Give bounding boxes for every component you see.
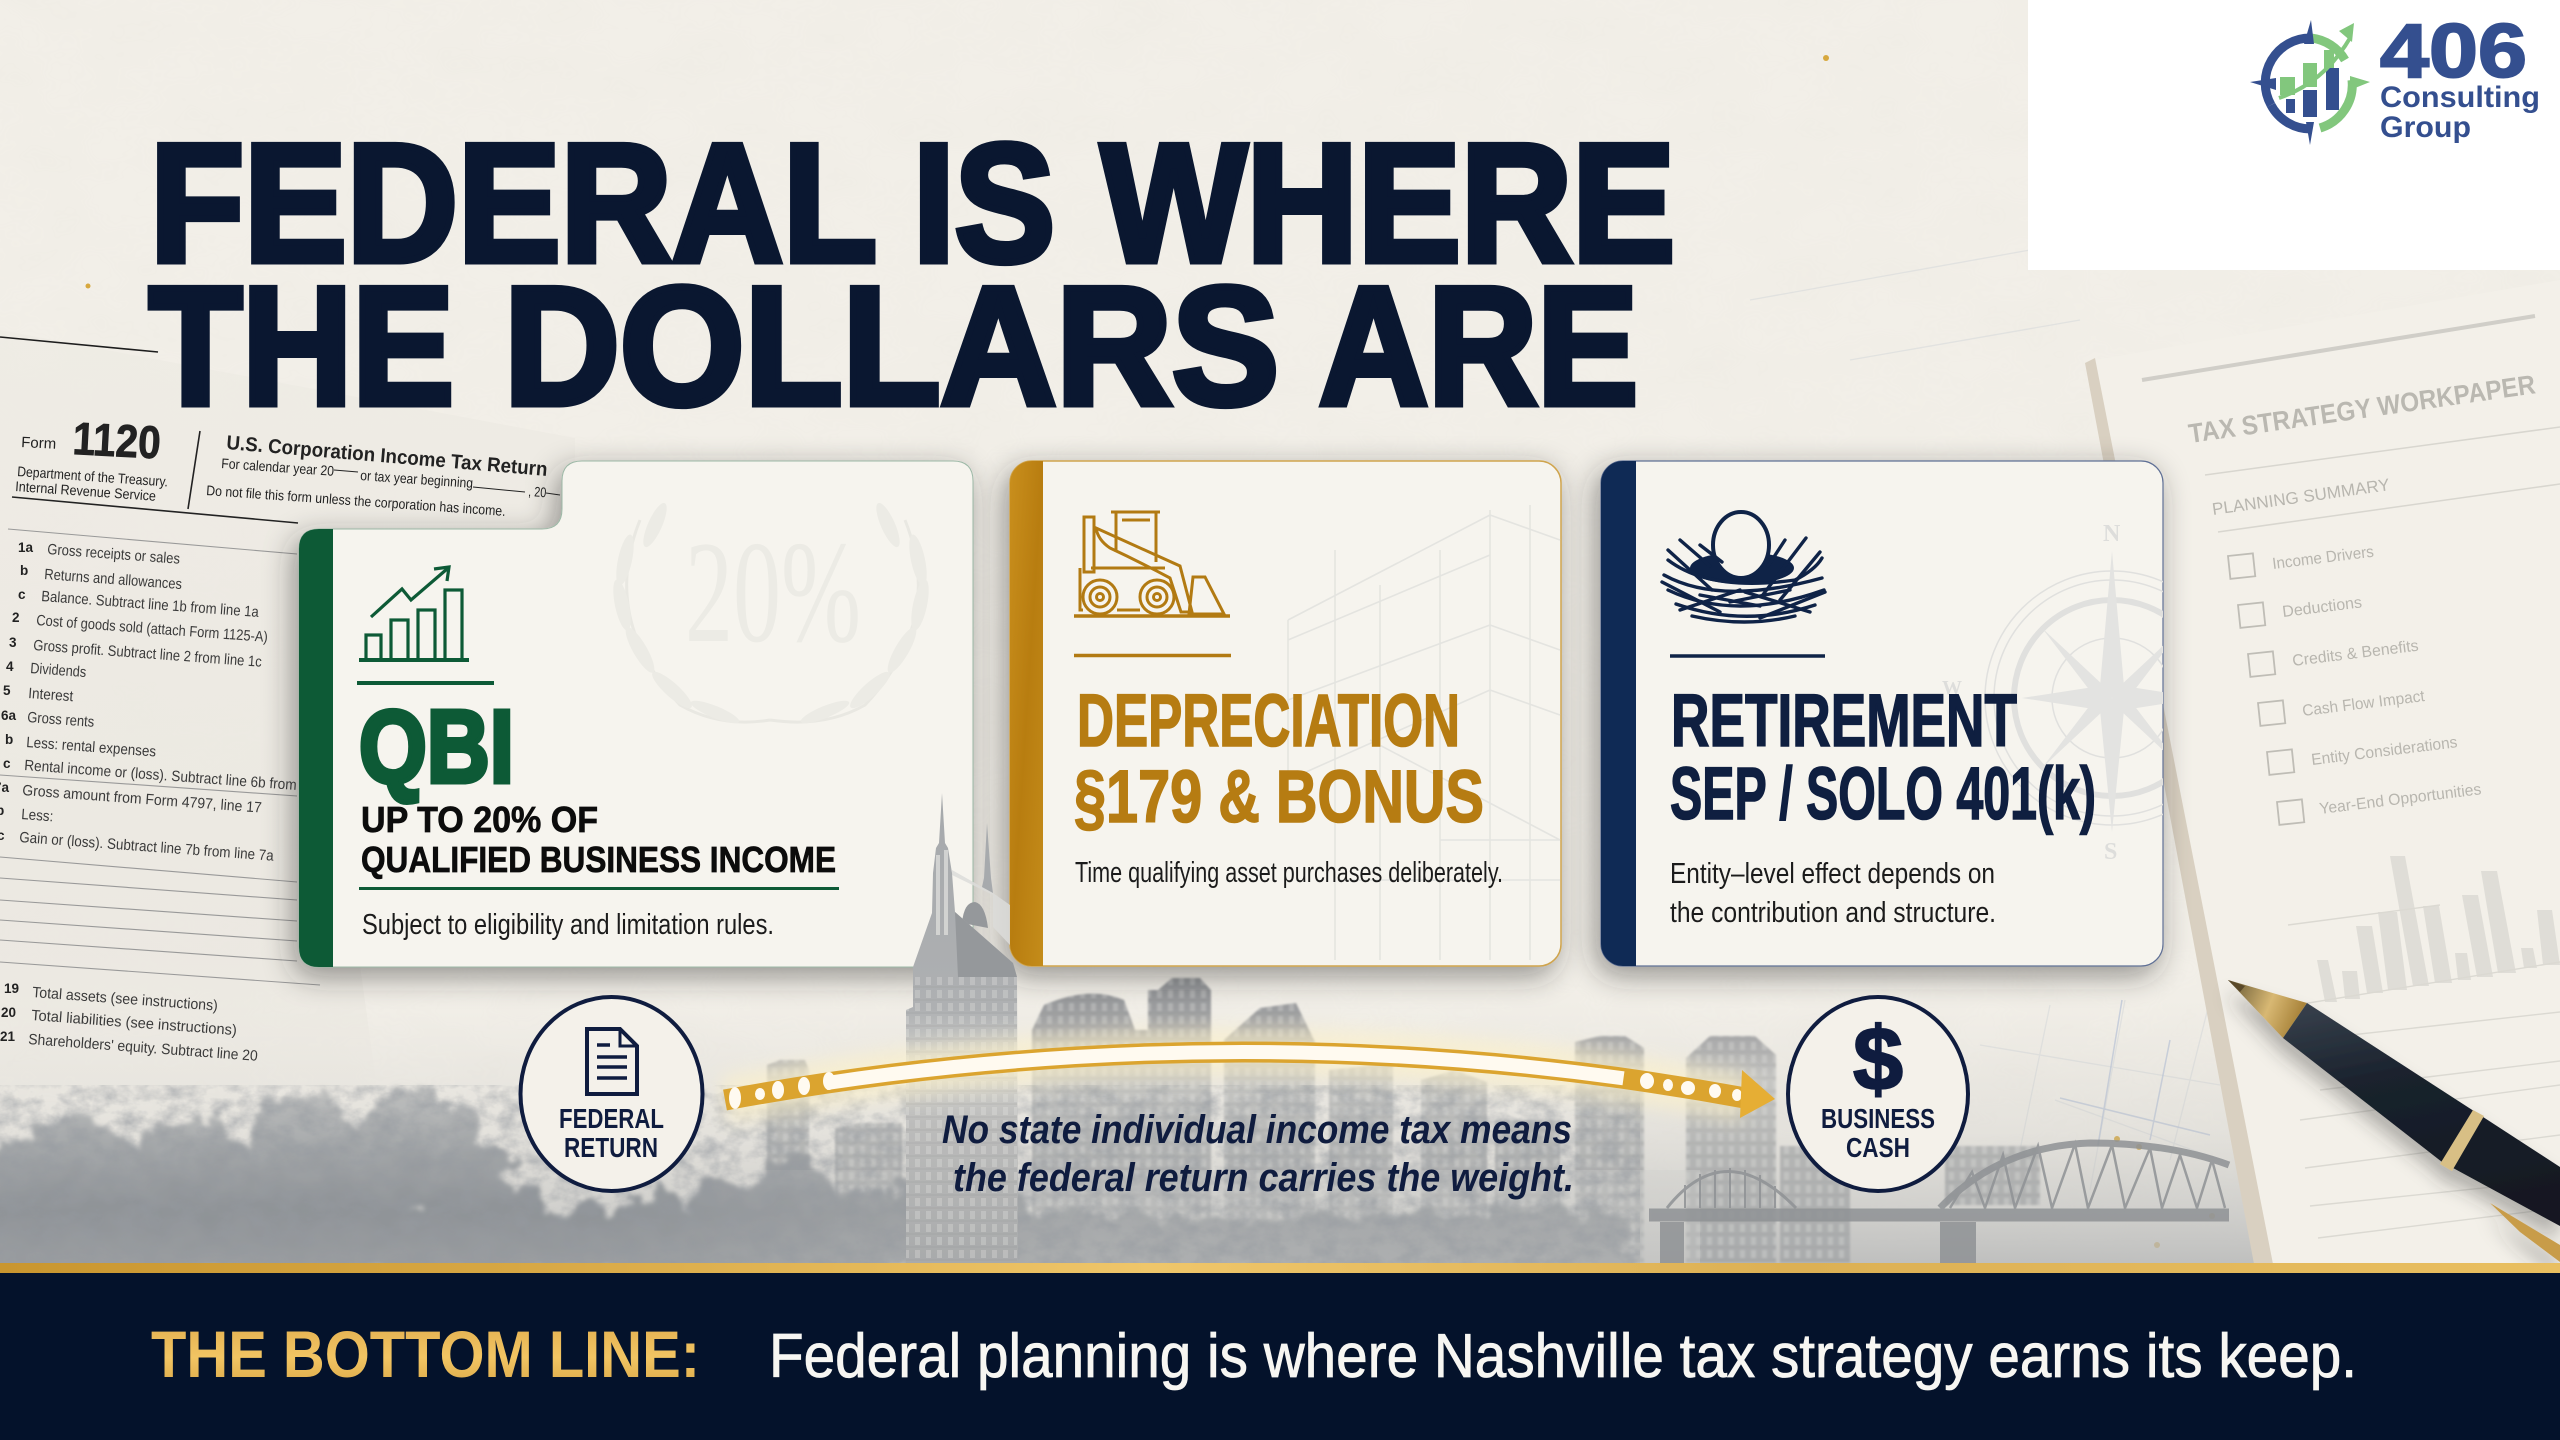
arrow caption	[942, 1108, 1574, 1200]
QBI subheading	[361, 799, 836, 880]
QBI subheading: QUALIFIED BUSINESS INCOME	[361, 839, 836, 880]
checklist: Credits & Benefits	[2291, 638, 2420, 670]
bottom line label: THE BOTTOM LINE:	[151, 1317, 700, 1391]
badge label: BUSINESS	[1821, 1103, 1935, 1134]
logo	[2028, 0, 2560, 270]
logo wordmark: 406	[2380, 9, 2527, 94]
form line numbers: b	[20, 563, 28, 578]
badge label	[1821, 1103, 1935, 1163]
form header: 1120	[71, 412, 162, 469]
badge label: FEDERAL	[559, 1103, 664, 1134]
form lines: Less: rental expenses	[26, 734, 157, 761]
form header: , 20	[528, 483, 547, 500]
form lines: Interest	[28, 685, 75, 705]
trees	[0, 1088, 1630, 1288]
icon: rising bar chart	[359, 567, 469, 660]
form lines	[19, 541, 297, 1065]
workpaper bar chart	[2317, 856, 2560, 1002]
form lines: Dividends	[30, 660, 87, 681]
form line numbers: b	[5, 732, 13, 747]
depreciation heading: DEPRECIATION	[1077, 679, 1460, 762]
icon: skid steer loader	[1074, 512, 1230, 616]
form lines: Gain or (loss). Subtract line 7b from line 7a	[19, 829, 275, 865]
form header: Form	[21, 434, 57, 453]
form header	[15, 412, 548, 519]
retirement note	[1670, 858, 1996, 929]
watermark: compass rose: S	[2104, 839, 2117, 865]
retirement heading	[1670, 679, 2096, 835]
icon: nest egg	[1662, 512, 1825, 622]
logo wordmark: Group	[2380, 111, 2471, 144]
watermark: 20% laurel	[610, 500, 932, 727]
form lines: Rental income or (loss). Subtract line 6b from	[24, 757, 297, 794]
form lines: Gross receipts or sales	[47, 541, 181, 568]
title: WHERE	[1101, 109, 1675, 297]
retirement heading: RETIREMENT	[1671, 679, 2017, 762]
arrow caption: No state individual income tax means	[942, 1108, 1572, 1152]
form line numbers: c	[18, 587, 26, 602]
watermark: compass rose: W	[1942, 677, 1962, 699]
watermark: 20% laurel: 20%	[685, 511, 861, 673]
form 1120 paper	[0, 330, 575, 1110]
arrow head	[1740, 1070, 1775, 1118]
title: FEDERAL	[150, 109, 877, 297]
watermark: building sketch	[1288, 505, 1560, 960]
checklist: Year-End Opportunities	[2318, 781, 2482, 818]
depreciation heading	[1074, 679, 1484, 838]
gold flow arrow	[725, 1052, 1775, 1118]
form line numbers: 20	[1, 1005, 16, 1020]
checklist: Cash Flow Impact	[2301, 688, 2426, 720]
watermark: compass rose	[1942, 525, 2163, 859]
form header: Do not file this form unless the corporation has income.	[206, 482, 506, 519]
form line numbers: 3	[9, 635, 17, 650]
form lines: Gross profit. Subtract line 2 from line 1c	[33, 637, 263, 671]
title: ARE	[1319, 252, 1638, 440]
title: IS	[913, 109, 1055, 297]
bridge	[1649, 1143, 2229, 1263]
badge label	[559, 1103, 664, 1163]
form lines: Gross amount from Form 4797, line 17	[22, 782, 262, 817]
form header: Internal Revenue Service	[15, 478, 157, 504]
form lines: Balance. Subtract line 1b from line 1a	[41, 588, 260, 621]
tax strategy workpaper	[2085, 280, 2560, 1264]
checklist: Entity Considerations	[2310, 734, 2458, 769]
watermark: compass rose: N	[2103, 521, 2121, 547]
form lines: Gross rents	[27, 709, 95, 731]
form lines: Shareholders' equity. Subtract line 20	[28, 1031, 258, 1065]
bottom line message: Federal planning is where Nashville tax strategy earns its keep.	[769, 1322, 2357, 1391]
form line numbers: 21	[0, 1029, 16, 1044]
form header: For calendar year 20	[221, 455, 335, 479]
title: DOLLARS	[504, 252, 1279, 440]
badge: business cash	[1788, 997, 1968, 1191]
form header: Department of the Treasury.	[17, 463, 169, 490]
depreciation heading: §179 & BONUS	[1074, 755, 1484, 838]
logo wordmark	[2380, 9, 2540, 144]
form line numbers: 4	[6, 659, 14, 674]
form line numbers	[0, 540, 34, 1044]
arrow caption: the federal return carries the weight.	[953, 1156, 1574, 1200]
form line numbers: 5	[3, 683, 11, 698]
depreciation note: Time qualifying asset purchases deliberately.	[1075, 857, 1503, 889]
retirement note: Entity–level effect depends on	[1670, 858, 1995, 890]
form lines: Total assets (see instructions)	[32, 984, 218, 1015]
QBI note: Subject to eligibility and limitation rules.	[362, 909, 774, 941]
title: THE	[149, 252, 454, 440]
card: depreciation	[1010, 461, 1561, 966]
card: QBI	[299, 461, 973, 967]
checklist: Income Drivers	[2271, 544, 2375, 573]
retirement note: the contribution and structure.	[1670, 897, 1996, 929]
form line numbers: 6a	[1, 708, 17, 723]
form line numbers: 1a	[18, 540, 34, 555]
planning summary: PLANNING SUMMARY	[2211, 475, 2391, 519]
checklist: Deductions	[2281, 594, 2363, 621]
badge: federal return	[520, 997, 702, 1191]
checklist	[2228, 544, 2482, 825]
QBI subheading: UP TO 20% OF	[361, 799, 598, 840]
logo compass mark	[2250, 20, 2370, 145]
city skyline background	[0, 978, 2320, 1288]
form line numbers: 19	[4, 981, 19, 996]
form lines: Total liabilities (see instructions)	[31, 1007, 237, 1039]
logo wordmark: Consulting	[2380, 81, 2540, 114]
badge label: CASH	[1846, 1132, 1910, 1163]
form lines: Less:	[21, 806, 54, 825]
form header: or tax year beginning	[360, 467, 474, 491]
form header: U.S. Corporation Income Tax Return	[226, 432, 548, 481]
form lines: Returns and allowances	[44, 566, 183, 593]
form lines: Cost of goods sold (attach Form 1125-A)	[36, 612, 268, 646]
badge label: RETURN	[564, 1132, 658, 1163]
title	[149, 109, 1675, 440]
QBI heading: QBI	[359, 689, 514, 804]
form line numbers: c	[3, 756, 11, 771]
card: retirement	[1601, 461, 2239, 966]
retirement heading: SEP / SOLO 401(k)	[1670, 752, 2096, 835]
bottom line banner	[0, 1263, 2560, 1440]
workpaper rules	[2288, 905, 2560, 1238]
downtown buildings	[767, 978, 2040, 1263]
icon: dollar sign: $	[1853, 1010, 1903, 1110]
form line numbers: 2	[12, 610, 20, 625]
arrow dots	[729, 1072, 1742, 1109]
icon: document	[587, 1029, 637, 1094]
pen	[2228, 980, 2560, 1262]
batman building	[906, 793, 1018, 1263]
